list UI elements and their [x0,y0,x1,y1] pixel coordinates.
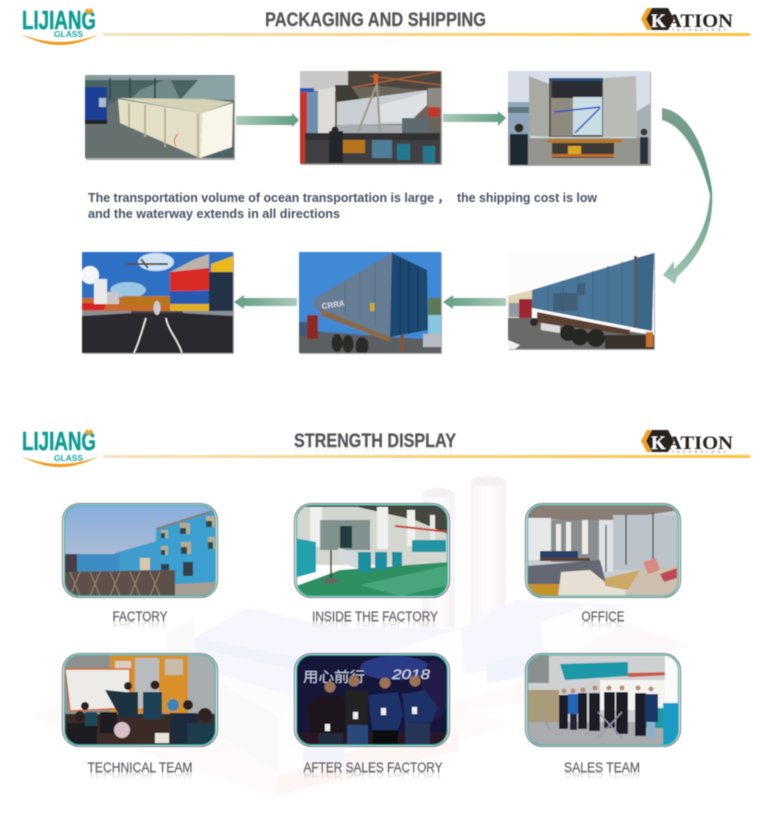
logo: Kation Technology: ATION [667,11,733,32]
label: office [582,608,624,634]
panel: inside the factory [294,503,450,598]
panel: factory [62,503,218,598]
heading: strength display: STRENGTH DISPLAY [294,431,456,452]
arrow: loading to container [443,111,506,126]
header rule [103,33,750,36]
logo: Kation Technology: ATION [667,433,733,454]
heading: strength display [294,431,456,463]
header rule [103,455,750,458]
section: packaging and shipping header [21,5,750,45]
heading: packaging and shipping: PACKAGING AND SHIPPING [265,10,486,31]
logo: Lijiang Glass [21,5,99,45]
text block: ocean transportation description: The transportation volume of ocean transportation is large ， [88,191,450,205]
photo: multimodal shipping montage [81,252,234,354]
label: after sales factory: AFTER SALES FACTORY [304,769,443,785]
logo: Kation Technology [641,8,733,32]
logo: Kation Technology: TECHNOLOGY [672,28,727,32]
label: sales team: SALES TEAM [564,769,640,785]
heading: packaging and shipping [265,10,486,42]
photo: container truck side view [508,252,655,350]
label: after sales factory [304,759,443,785]
logo: Kation Technology: K [651,433,666,454]
panel: sales team [525,653,681,747]
label: technical team [88,759,192,785]
logo: Lijiang Glass: GLASS [54,453,83,463]
section: strength display header [21,426,750,467]
logo: Lijiang Glass: GLASS [54,29,83,39]
logo: Lijiang Glass [21,426,99,467]
text block: ocean transportation description: the shipping cost is low [457,191,597,205]
panel: after sales factory [294,653,450,747]
curved arrow: container to truck [662,108,712,284]
label: technical team: TECHNICAL TEAM [88,759,192,775]
panel: after sales factory: 2018 [391,666,430,682]
text block: ocean transportation description [88,191,597,221]
logo: Lijiang Glass: LIJIANG [22,426,96,456]
background watermark: factory illustration [29,476,688,796]
photo: crane loading crate [300,71,442,165]
label: office: OFFICE [582,608,624,624]
label: sales team: SALES TEAM [564,759,640,775]
arrow: crate to loading [236,113,299,127]
heading: strength display: STRENGTH DISPLAY [294,442,456,463]
arrow: road transport to global shipping [234,295,297,309]
label: factory: FACTORY [112,608,168,624]
heading: packaging and shipping: PACKAGING AND SHIPPING [265,21,486,42]
text block: ocean transportation description: and the waterway extends in all directions [88,207,340,221]
label: factory [112,608,168,634]
photo: container truck rear view: CRRA [321,299,345,311]
label: factory: FACTORY [112,618,168,634]
logo: Lijiang Glass: LIJIANG [22,5,96,35]
label: sales team [564,759,640,785]
photo: crate inside open container [508,71,651,166]
label: office: OFFICE [582,618,624,634]
panel: office [525,503,681,598]
label: after sales factory: AFTER SALES FACTORY [304,759,443,775]
photo: wooden crate in warehouse [85,75,235,160]
logo: Kation Technology: TECHNOLOGY [672,450,727,454]
panel: technical team [62,653,218,747]
panel: after sales factory: 用心前行 [303,669,365,685]
label: technical team: TECHNICAL TEAM [88,769,192,785]
label: inside the factory: INSIDE THE FACTORY [312,618,439,634]
logo: Kation Technology: K [651,11,666,32]
logo: Kation Technology [641,430,733,454]
arrow: truck to road transport [443,295,506,309]
photo: container truck rear view [299,252,442,355]
label: inside the factory: INSIDE THE FACTORY [312,608,439,624]
label: inside the factory [312,608,439,634]
